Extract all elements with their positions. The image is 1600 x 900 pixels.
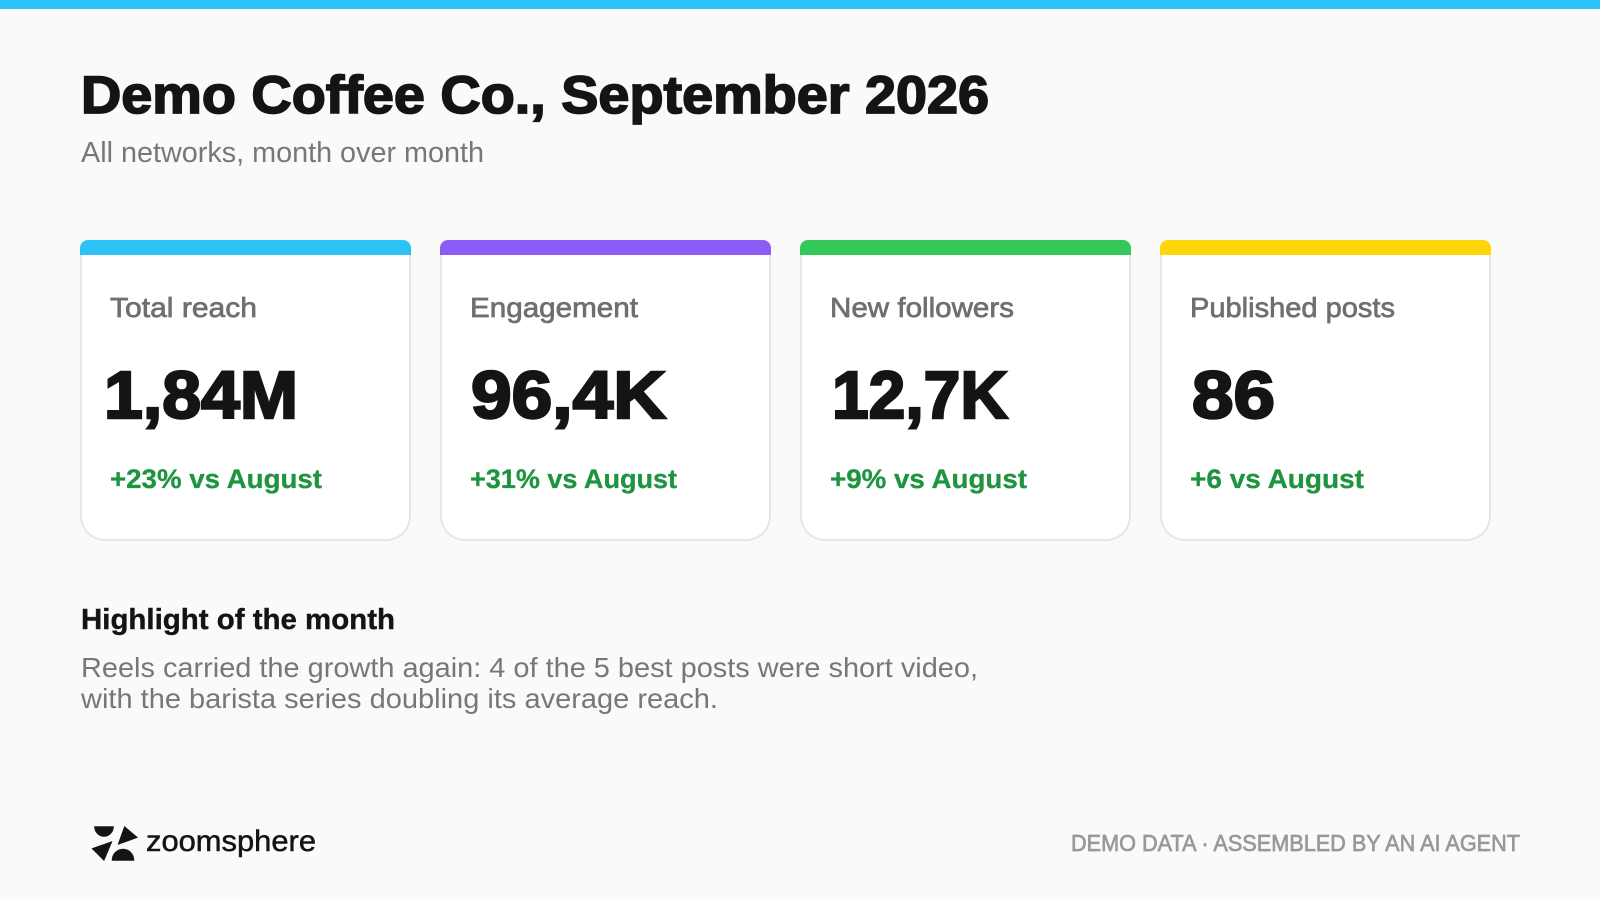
delta: published posts: +6 vs August [1190,464,1364,494]
label: published posts: Published posts [1190,292,1395,323]
subtitle: All networks, month over month [81,137,484,169]
label: new followers: New followers [830,292,1014,323]
highlight heading: Highlight of the month [81,604,395,636]
delta: total reach: +23% vs August [110,464,322,494]
top accent bar [0,0,1600,9]
title: Demo Coffee Co., September 2026 [81,66,989,125]
delta: engagement: +31% vs August [470,464,677,494]
label: total reach: Total reach [110,292,257,323]
panel: new followers [800,240,1131,540]
panel: published posts [1160,240,1491,540]
value: engagement: 96,4K [471,358,666,433]
highlight body text: Reels carried the growth again: 4 of the 5 best posts were short video, [81,652,978,683]
delta: new followers: +9% vs August [830,464,1027,494]
value: new followers: 12,7K [832,358,1008,433]
panel: total reach [80,240,411,540]
panel: engagement [440,240,771,540]
wordmark: zoomsphere [146,825,316,858]
value: published posts: 86 [1192,358,1275,433]
label: engagement: Engagement [470,292,638,323]
highlight body text [80,652,978,714]
footer note: DEMO DATA · ASSEMBLED BY AN AI AGENT [1071,830,1520,856]
value: total reach: 1,84M [104,358,298,433]
icon: zoomsphere mark [92,826,138,860]
highlight body text: with the barista series doubling its average reach. [80,683,718,714]
logo: zoomsphere [92,825,316,860]
